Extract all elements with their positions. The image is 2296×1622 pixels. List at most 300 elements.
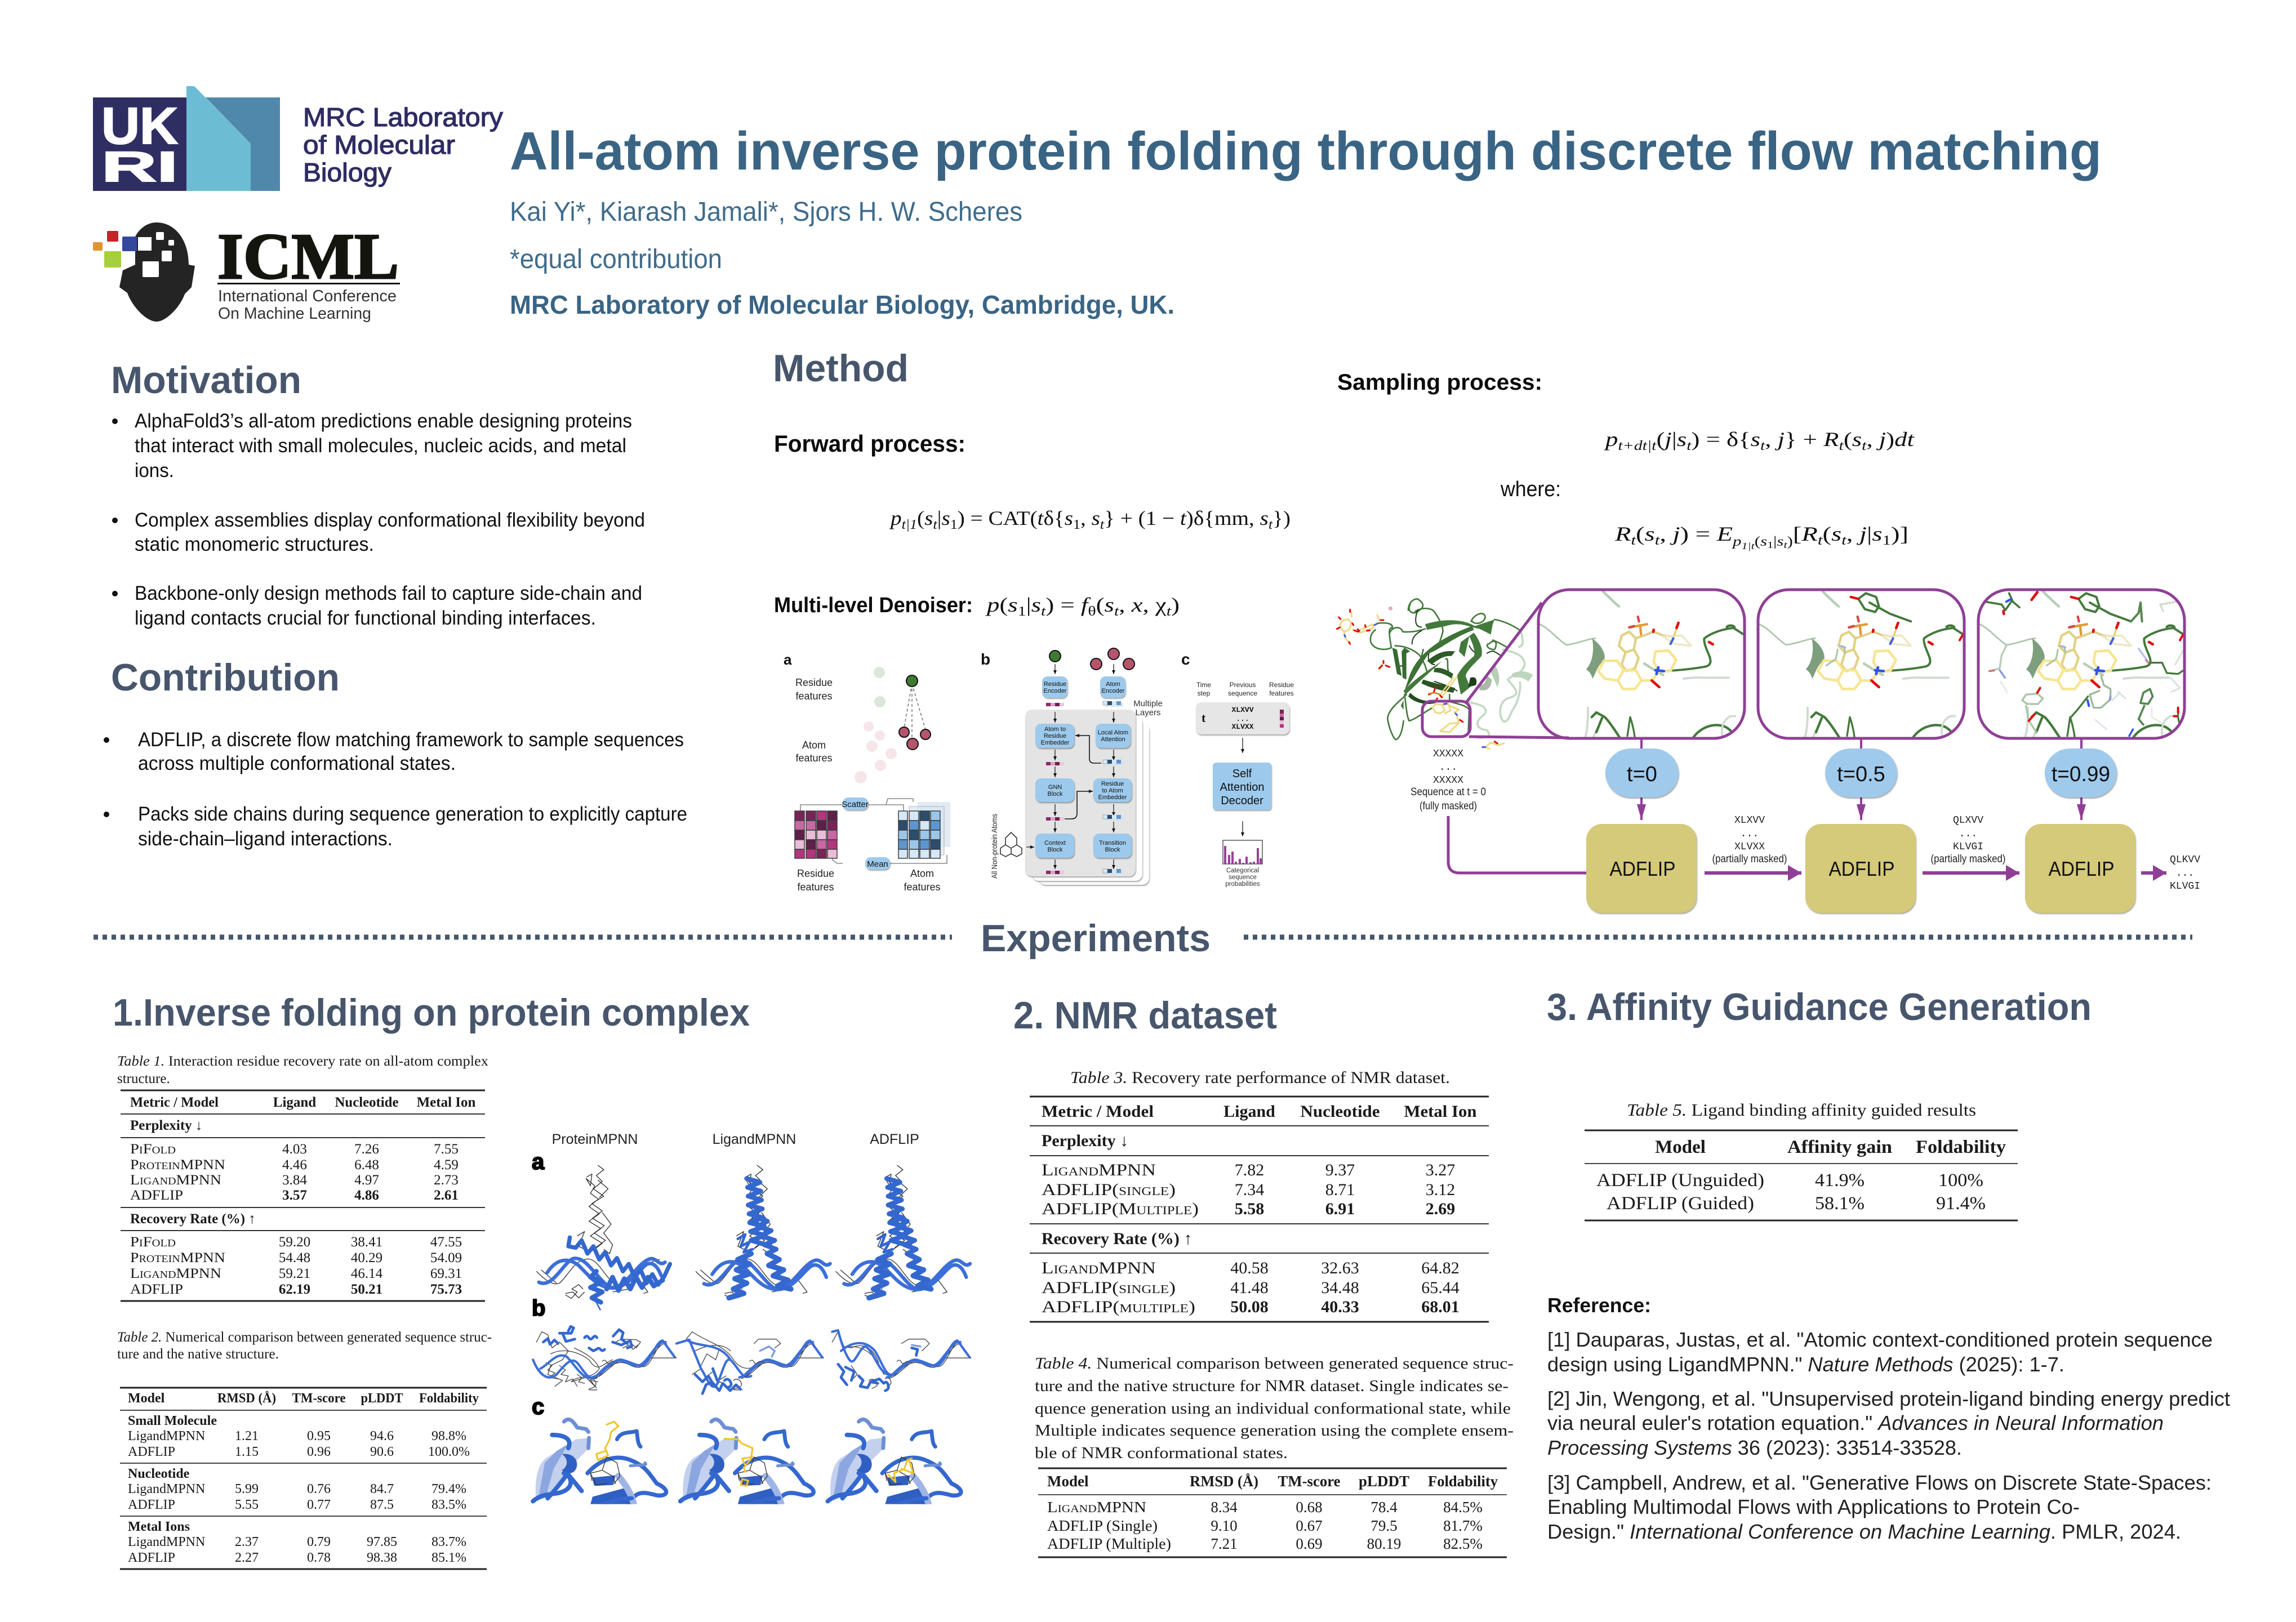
table 4: 84.5% [1443, 1499, 1483, 1516]
table 1: Recovery Rate (%) ↑ [130, 1211, 256, 1227]
references: Enabling Multimodal Flows with Applications to Protein Co- [1547, 1495, 2080, 1518]
table 3: 64.82 [1421, 1259, 1460, 1277]
equation: sampling: ( [1844, 428, 1852, 451]
logo: ICML: International Conference [218, 287, 397, 305]
time step t=0.5 [1825, 748, 1897, 797]
table 4: LigandMPNN [1047, 1499, 1146, 1516]
table 3: 32.63 [1321, 1259, 1359, 1277]
panel c: self attention decoder: t [1202, 711, 1206, 725]
row labels: a [532, 1149, 545, 1174]
equation: denoiser: | [1026, 594, 1031, 616]
table 4: 0.67 [1296, 1517, 1323, 1534]
sequence labels: ... [1439, 762, 1457, 773]
table 1: 59.21 [279, 1266, 310, 1281]
row labels: b [532, 1296, 545, 1321]
figure: sampling process [1337, 590, 2200, 913]
ADFLIP block 3: ADFLIP [2048, 857, 2115, 880]
equation: forward process: t)δ{mm, s [1180, 507, 1268, 529]
row b: structures [533, 1326, 971, 1394]
table 3: ADFLIP(single) [1042, 1278, 1176, 1297]
sequence labels: XXXXX [1433, 775, 1463, 786]
equation: forward process: t|1 [902, 518, 917, 532]
table 1: Ligand [273, 1095, 316, 1110]
panel c: self attention decoder: Attention [1220, 781, 1264, 794]
table 1: structure. [117, 1071, 170, 1086]
panel c: self attention decoder: Self [1232, 768, 1252, 780]
equation: forward process: t [1100, 518, 1105, 532]
table 2: TM-score [292, 1391, 346, 1406]
heading: Motivation: Motivation [111, 359, 301, 402]
panel b: multi-layer denoiser: Atom [1106, 681, 1120, 688]
table 1 [117, 1054, 489, 1301]
equation: forward process: s [924, 507, 933, 529]
table 4: 8.34 [1211, 1499, 1238, 1516]
panel b: multi-layer denoiser: Block [1048, 791, 1063, 797]
equation: forward process: p [889, 507, 902, 529]
equation: sampling: ) = δ{ [1692, 428, 1751, 451]
equation: rate: t [1841, 533, 1848, 548]
logo: ICML [93, 221, 400, 323]
table 5: 100% [1938, 1170, 1983, 1191]
equation: rate: , [1846, 523, 1859, 545]
panel c: self attention decoder: Previous [1230, 681, 1256, 689]
logo: UKRI MRC Laboratory of Molecular Biology: RI [101, 143, 178, 191]
panel a: residue and atom features: Scatter [842, 800, 869, 809]
table 2: 0.77 [307, 1498, 331, 1512]
table 2: ture and the native structure. [117, 1347, 279, 1362]
heading: Method: Method [773, 347, 909, 390]
equation: sampling: , [1765, 428, 1778, 451]
heading: Contribution: Contribution [111, 656, 340, 699]
table 2: LigandMPNN [128, 1482, 205, 1496]
table 2: Model [128, 1391, 165, 1406]
panel a: residue and atom features: Residue [795, 677, 833, 688]
logo: ICML: ICML [217, 221, 399, 293]
equation: denoiser: p(s [987, 594, 1016, 616]
table 2: 98.8% [431, 1429, 466, 1443]
table 3: 9.37 [1325, 1161, 1355, 1179]
zoom outline on protein [1467, 603, 1569, 738]
sequence labels: QLXVV [1953, 815, 1983, 826]
table 2: Small Molecule [128, 1414, 217, 1428]
table 2: Nucleotide [128, 1467, 190, 1481]
table 1: 6.48 [354, 1157, 379, 1173]
panel b: multi-layer denoiser: Transition [1099, 840, 1126, 846]
table 3: ADFLIP(single) [1042, 1180, 1176, 1199]
heading: Inverse folding: 1.Inverse folding on protein complex [113, 991, 750, 1034]
heading: NMR dataset: 2. NMR dataset [1013, 994, 1277, 1037]
panel b: multi-layer denoiser: to Atom [1102, 787, 1123, 794]
panel c: self attention decoder: features [1269, 689, 1294, 697]
table 4: 7.21 [1211, 1535, 1238, 1552]
table 5: Affinity gain [1787, 1137, 1892, 1157]
table 1: Table 1. Interaction residue recovery rate on all-atom complex [117, 1054, 489, 1069]
row c: binding pockets [533, 1419, 961, 1504]
table 4: RMSD (Å) [1190, 1473, 1258, 1490]
table 4: 80.19 [1367, 1535, 1401, 1552]
table 3: 5.58 [1235, 1200, 1264, 1218]
table 3: Ligand [1223, 1102, 1275, 1121]
table 4: 82.5% [1443, 1535, 1483, 1552]
table 2: 0.78 [307, 1550, 331, 1565]
table 2: LigandMPNN [128, 1535, 205, 1549]
panel c: self attention decoder: Categorical [1226, 867, 1259, 874]
references: [1] Dauparas, Justas, et al. "Atomic context-conditioned protein sequence [1547, 1328, 2213, 1351]
table 1: 4.59 [434, 1157, 459, 1173]
panel c: self attention decoder: XLVXX [1231, 723, 1254, 731]
panel b: multi-layer denoiser: Atom to [1044, 726, 1066, 733]
table 1: 54.09 [430, 1250, 462, 1265]
table 1: 3.57 [282, 1188, 307, 1203]
table 3: 50.08 [1230, 1298, 1269, 1316]
table 3: Metric / Model [1042, 1102, 1154, 1121]
equation: rate: )] [1891, 523, 1908, 545]
equation: forward process: ( [917, 507, 924, 529]
panel: motivation bullets: AlphaFold3’s all-atom predictions enable designing proteins [135, 410, 632, 432]
heading: Affinity guidance: 3. Affinity Guidance Generation [1547, 986, 2092, 1028]
equation: rate: ( [1636, 523, 1645, 545]
table 3: ADFLIP(multiple) [1042, 1298, 1195, 1316]
table 2: 100.0% [428, 1445, 470, 1459]
table 3: 40.58 [1230, 1259, 1269, 1277]
row labels [532, 1149, 545, 1419]
sequence labels: (partially masked) [1712, 853, 1787, 865]
table 3: 7.34 [1235, 1180, 1264, 1199]
equation: forward process: 1 [1073, 518, 1080, 532]
table 2: 0.95 [307, 1429, 331, 1443]
ADFLIP block 3 [2025, 824, 2135, 913]
panel c: self attention decoder: Time [1196, 681, 1211, 689]
table 4: 79.5 [1371, 1517, 1398, 1534]
panel: pocket at t=0.5 [1757, 590, 1964, 738]
table 3: 41.48 [1230, 1278, 1269, 1297]
ADFLIP block 2: ADFLIP [1828, 857, 1895, 880]
column labels: LigandMPNN [713, 1131, 796, 1147]
table 3: 3.27 [1426, 1161, 1455, 1179]
equation: sampling: t [1687, 439, 1692, 453]
equation: forward process: t [933, 518, 938, 532]
references: design using LigandMPNN." Nature Methods (2025): 1-7. [1547, 1353, 2064, 1376]
ADFLIP block 1 [1586, 824, 1697, 913]
table 2: RMSD (Å) [217, 1391, 276, 1406]
table 2: 79.4% [431, 1482, 466, 1496]
table 2: 90.6 [370, 1445, 394, 1459]
panel a: residue and atom features: a [784, 651, 792, 668]
table 5: Model [1655, 1137, 1706, 1157]
table 2: 1.15 [235, 1445, 259, 1459]
panel: motivation bullets: Backbone-only design methods fail to capture side-chain and [135, 582, 642, 604]
table 5: 41.9% [1815, 1170, 1865, 1191]
equation: rate: s [1831, 523, 1841, 545]
panel: contribution bullets [104, 729, 687, 850]
table 1: 2.73 [434, 1173, 459, 1188]
table 4: Table 4. Numerical comparison between generated sequence struc- [1035, 1354, 1514, 1373]
equation: forward process: s [1092, 507, 1100, 529]
equation: sampling: t [1760, 439, 1766, 453]
table 2: pLDDT [361, 1391, 403, 1406]
equation: forward process: tδ{s [1038, 507, 1073, 529]
panel a: residue and atom features: features [797, 881, 834, 893]
sequence labels: (partially masked) [1931, 853, 2005, 865]
panel: contribution bullets: across multiple conformational states. [138, 752, 456, 774]
equation: rate: ( [1755, 534, 1760, 549]
sequence labels: ... [1959, 828, 1977, 840]
equation: rate: [ [1793, 523, 1801, 545]
table 1: ProteinMPNN [130, 1157, 225, 1173]
ADFLIP block 1: ADFLIP [1610, 857, 1675, 880]
panel b: multi-layer denoiser: Layers [1135, 708, 1161, 718]
panel c: self attention decoder: ... [1236, 715, 1249, 723]
sequence labels: KLVGI [2170, 881, 2200, 892]
panel b: multi-layer denoiser: Encoder [1044, 688, 1067, 694]
table 1: 4.86 [354, 1188, 379, 1203]
panel b: multi-layer denoiser: Embedder [1098, 794, 1127, 801]
connectors and arrows [1448, 738, 2166, 873]
panel c: self attention decoder: XLXVV [1231, 706, 1254, 714]
table 1: 54.48 [279, 1250, 310, 1265]
sequence labels: XLVXX [1734, 841, 1765, 853]
authors: Kai Yi*, Kiarash Jamali*, Sjors H. W. Scheres [510, 197, 1022, 227]
table 2: 2.37 [235, 1535, 259, 1549]
equation: rate: s [1645, 523, 1655, 545]
logo: UKRI MRC Laboratory of Molecular Biology: Biology [303, 158, 391, 187]
heading: Sampling process: Sampling process: [1337, 370, 1542, 395]
sequence labels: XLXVV [1734, 815, 1765, 826]
table 1: 4.97 [354, 1173, 379, 1188]
panel: pocket at t=0.99 [1977, 590, 2184, 738]
table 2: 5.99 [235, 1482, 259, 1496]
equation: forward process: ) = CAT( [958, 507, 1038, 529]
table 3: 7.82 [1235, 1161, 1264, 1179]
panel c: self attention decoder: Decoder [1221, 795, 1263, 807]
equation: rate: 1|t [1742, 541, 1755, 551]
panel a: residue and atom features: features [904, 881, 941, 893]
equation: denoiser: , [1119, 594, 1132, 616]
panel: motivation bullets: Complex assemblies display conformational flexibility beyond [135, 509, 645, 531]
table 2: ADFLIP [128, 1498, 175, 1512]
table 2: LigandMPNN [128, 1429, 205, 1443]
table 2: 83.5% [431, 1498, 466, 1512]
sequence labels: ... [1741, 828, 1759, 840]
table 2: 85.1% [431, 1550, 466, 1565]
equation: rate: 1 [1767, 540, 1773, 550]
row labels: c [532, 1394, 544, 1419]
table 3: Recovery Rate (%) ↑ [1042, 1229, 1192, 1248]
table 1: Metal Ion [417, 1095, 476, 1110]
table 3: 3.12 [1426, 1180, 1455, 1199]
heading: Forward process: Forward process: [774, 430, 965, 457]
ADFLIP block 2 [1805, 824, 1916, 913]
panel c: self attention decoder: step [1198, 689, 1211, 697]
affiliation: MRC Laboratory of Molecular Biology, Cambridge, UK. [510, 290, 1174, 319]
table 1: Perplexity ↓ [130, 1118, 202, 1133]
table 3: LigandMPNN [1042, 1259, 1156, 1277]
panel b: multi-layer denoiser: All Non-protein Atoms [990, 814, 999, 879]
table 1: PiFold [130, 1235, 176, 1250]
table 3: Table 3. Recovery rate performance of NMR dataset. [1070, 1068, 1450, 1087]
table 1: 62.19 [279, 1282, 310, 1297]
panel c: self attention decoder: probabilities [1225, 881, 1260, 888]
logo: UKRI MRC Laboratory of Molecular Biology: UK [101, 97, 178, 155]
figure: model architecture [784, 648, 1294, 893]
table 5: ADFLIP (Unguided) [1596, 1170, 1764, 1191]
panel: motivation bullets: ligand contacts crucial for functional binding interfaces. [135, 607, 596, 629]
equation: forward process: | [937, 507, 941, 529]
time step t=0.99: t=0.99 [2052, 763, 2110, 786]
table 4: Multiple indicates sequence generation using the complete ensem- [1035, 1422, 1514, 1440]
equation: sampling: t+dt|t [1618, 439, 1657, 453]
references: [2] Jin, Wengong, et al. "Unsupervised protein-ligand binding energy predict [1547, 1387, 2230, 1410]
equation: denoiser: s [1031, 594, 1041, 616]
divider and heading: Experiments: Experiments [981, 917, 1211, 960]
equation: rate: s [1777, 534, 1783, 549]
table 2: 97.85 [367, 1535, 397, 1549]
column labels: ADFLIP [870, 1131, 919, 1147]
equation: rate: t [1818, 533, 1823, 548]
table 1: 47.55 [430, 1235, 462, 1250]
table 4: TM-score [1278, 1473, 1341, 1490]
sequence labels: Sequence at t = 0 [1410, 786, 1486, 798]
panel b: multi-layer denoiser: b [981, 650, 990, 668]
logo: ICML: On Machine Learning [218, 305, 371, 323]
equation: sampling: j|s [1665, 428, 1685, 451]
panel b: multi-layer denoiser: Encoder [1102, 688, 1125, 694]
table 1: Nucleotide [335, 1095, 399, 1110]
panel a: residue and atom features: Atom [910, 868, 934, 879]
sequence labels: QLKVV [2170, 854, 2200, 866]
sequence labels: XXXXX [1433, 748, 1463, 760]
equation: rate: ( [1823, 523, 1831, 545]
table 1: 7.26 [354, 1142, 379, 1157]
equation: denoiser: ) = [1045, 594, 1081, 616]
table 1: ADFLIP [130, 1282, 183, 1297]
panel a: residue and atom features: features [795, 752, 833, 764]
table 1: 4.46 [282, 1157, 307, 1173]
table 3 [1030, 1068, 1489, 1322]
table 4: 0.69 [1296, 1535, 1323, 1552]
panel: contribution bullets: Packs side chains during sequence generation to explicitly capture [138, 803, 687, 825]
panel: motivation bullets: static monomeric structures. [135, 533, 374, 555]
table 3: 8.71 [1325, 1180, 1355, 1199]
equation: denoiser: ( [1096, 594, 1105, 616]
table 3: ADFLIP(Multiple) [1042, 1200, 1199, 1218]
sequence labels: ... [2176, 868, 2194, 879]
panel b: multi-layer denoiser: GNN [1048, 784, 1062, 791]
table 1: 3.84 [282, 1173, 307, 1188]
table 1: 38.41 [351, 1235, 382, 1250]
panel: contribution bullets: ADFLIP, a discrete flow matching framework to sample sequences [138, 729, 684, 751]
equation: rate: R [1614, 523, 1631, 545]
table 1: 4.03 [282, 1142, 307, 1157]
equation: forward process: } + (1 − [1104, 507, 1180, 529]
panel b: multi-layer denoiser: Attention [1101, 736, 1125, 743]
table 1: LigandMPNN [130, 1266, 221, 1281]
table 2: 1.21 [235, 1429, 259, 1443]
references [1547, 1294, 2230, 1543]
figure: predicted structure comparison [532, 1131, 971, 1504]
equation: forward process: 1 [950, 518, 958, 532]
equation: rate: j) = E [1673, 523, 1729, 545]
panel b: multi-layer denoiser: Block [1048, 846, 1063, 853]
table 3: 2.69 [1426, 1200, 1455, 1218]
panel: motivation bullets [112, 410, 645, 629]
equation: sampling: s [1751, 428, 1760, 451]
table 3: 34.48 [1321, 1278, 1359, 1297]
table 4: 81.7% [1443, 1517, 1483, 1534]
table 5 [1585, 1100, 2018, 1220]
panel c: self attention decoder: sequence [1228, 689, 1257, 697]
time step t=0: t=0 [1627, 763, 1657, 786]
time step t=0 [1605, 748, 1679, 797]
table 1: ProteinMPNN [130, 1250, 225, 1265]
table 3: Perplexity ↓ [1042, 1131, 1128, 1150]
table 1: 7.55 [434, 1142, 459, 1157]
table 1: 69.31 [430, 1266, 462, 1281]
panel a: residue and atom features: Residue [797, 868, 834, 879]
equation: denoiser: t [1114, 604, 1120, 619]
equation: sampling: s [1852, 428, 1862, 451]
equation: rate: | [1773, 534, 1777, 549]
table 2: 5.55 [235, 1498, 259, 1512]
equation: rate: R [1801, 523, 1818, 545]
equation: denoiser: f [1081, 594, 1092, 616]
panel c: self attention decoder: Residue [1269, 681, 1294, 689]
panel c: self attention decoder [1181, 650, 1294, 888]
panel a: residue and atom features: Atom [802, 739, 826, 751]
column labels [552, 1131, 919, 1147]
table 3: Metal Ion [1404, 1102, 1477, 1121]
equal contribution note: *equal contribution [510, 244, 722, 274]
logo: UKRI MRC Laboratory of Molecular Biology: of Molecular [303, 130, 455, 159]
table 4 [1035, 1354, 1514, 1557]
equation: sampling: ( [1656, 428, 1665, 451]
panel b: multi-layer denoiser: Residue [1044, 681, 1066, 688]
equation: sampling: p [1603, 428, 1618, 451]
panel: motivation bullets: that interact with small molecules, nucleic acids, and metal [135, 435, 626, 457]
panel c: self attention decoder: c [1181, 650, 1190, 668]
table 4: Model [1047, 1473, 1089, 1490]
table 4: ADFLIP (Multiple) [1047, 1535, 1171, 1552]
table 1: 46.14 [351, 1266, 383, 1281]
equation: rate: 1 [1882, 533, 1891, 548]
table 4: ADFLIP (Single) [1047, 1517, 1158, 1534]
table 4: ture and the native structure for NMR dataset. Single indicates se- [1035, 1377, 1509, 1395]
row a: structures [536, 1165, 970, 1309]
table 5: 91.4% [1936, 1193, 1986, 1214]
table 2: 98.38 [367, 1550, 397, 1565]
table 1: LigandMPNN [130, 1173, 221, 1188]
table 2: 87.5 [370, 1498, 394, 1512]
equation: denoiser: s [1105, 594, 1114, 616]
equation: sampling: t [1839, 439, 1844, 453]
table 5: ADFLIP (Guided) [1607, 1193, 1754, 1214]
table 4: ble of NMR conformational states. [1035, 1444, 1288, 1462]
time step t=0.99 [2045, 748, 2117, 797]
equation: rate: , [1659, 523, 1673, 545]
sequence labels: KLVGI [1953, 841, 1983, 853]
panel: pocket at t=0 [1537, 590, 1745, 738]
equation: forward process: t [1269, 518, 1274, 532]
table 2: Metal Ions [128, 1519, 190, 1534]
table 4: pLDDT [1359, 1473, 1409, 1490]
equation: sampling: j)dt [1879, 428, 1910, 451]
table 2: Foldability [419, 1391, 479, 1406]
panel b: multi-layer denoiser: Residue [1101, 781, 1124, 787]
table 3: 68.01 [1421, 1298, 1460, 1316]
panel b: multi-layer denoiser: Residue [1044, 733, 1066, 739]
equation: denoiser: t [1041, 604, 1047, 619]
equation: sampling: , [1866, 428, 1879, 451]
